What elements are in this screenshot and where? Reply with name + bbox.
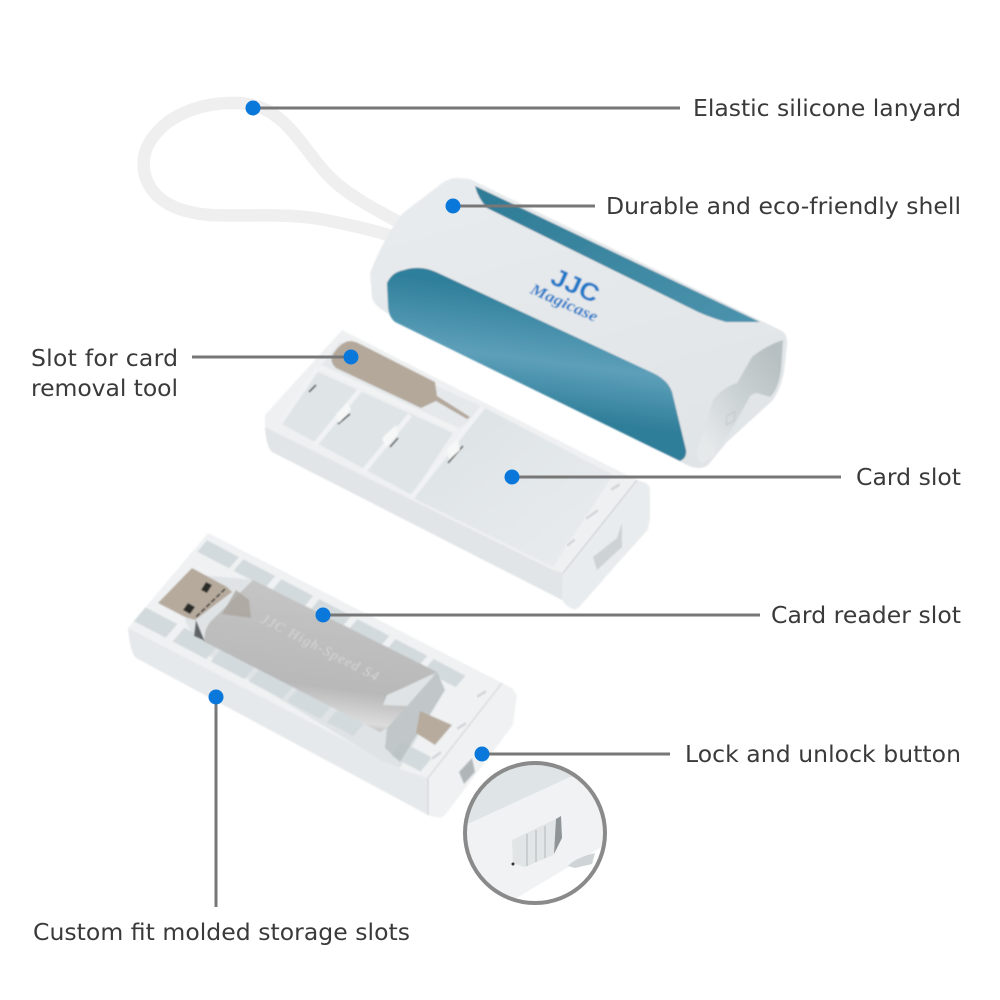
callout: slot for card removal tool: removal tool — [31, 374, 178, 402]
upper storage cells — [197, 540, 465, 687]
callout: card slot — [504, 463, 961, 491]
lock notch — [459, 758, 475, 784]
callout: card reader slot: Card reader slot — [771, 601, 961, 629]
callout: elastic silicone lanyard — [246, 94, 961, 122]
end cap seam — [563, 480, 637, 573]
callout: slot for card removal tool: Slot for card — [31, 344, 178, 372]
rib clips — [309, 385, 463, 463]
cap vents — [431, 689, 487, 761]
tray front wall — [128, 628, 428, 815]
USB-C plug and clear guard — [194, 620, 452, 762]
cap vents — [566, 482, 621, 548]
lower storage cells — [134, 607, 432, 771]
end cap seam — [428, 683, 502, 815]
tray front wall — [265, 427, 563, 600]
end cap — [562, 480, 650, 609]
callout: durable shell: Durable and eco-friendly shell — [606, 192, 961, 220]
lanyard — [144, 103, 412, 238]
inner notch — [726, 411, 735, 425]
divider ribs — [280, 367, 483, 497]
magnified lock button — [463, 761, 607, 905]
tray body — [128, 533, 517, 818]
callout: durable shell — [446, 192, 961, 220]
infographic canvas — [32, 96, 960, 945]
card reader body — [205, 580, 437, 732]
button — [512, 819, 556, 867]
shell — [370, 178, 787, 468]
callout: card slot: Card slot — [856, 463, 961, 491]
lower teal band — [387, 268, 686, 461]
upper teal band — [475, 186, 760, 322]
logo: Magicase — [527, 280, 600, 326]
left compartments floor — [280, 372, 453, 495]
logo: JJC — [547, 263, 604, 309]
callout: elastic silicone lanyard: Elastic silicone lanyard — [693, 94, 961, 122]
callout: slot for card removal tool — [31, 344, 358, 402]
callout: custom fit molded storage slots — [33, 690, 410, 946]
tool recess — [320, 342, 485, 430]
callout: custom fit molded storage slots: Custom fit molded storage slots — [33, 918, 410, 946]
logo — [527, 257, 611, 326]
reader printed text: JJC High-Speed S4 — [258, 612, 381, 685]
large compartment floor — [413, 408, 613, 567]
callout: card reader slot — [316, 601, 961, 629]
USB plug — [158, 568, 232, 620]
removal tool — [332, 341, 470, 419]
reader tray — [128, 533, 517, 818]
tray body — [265, 330, 650, 610]
lock button — [593, 523, 622, 570]
callout: lock and unlock button: Lock and unlock button — [685, 740, 961, 768]
callout: lock and unlock button — [474, 740, 961, 768]
reader cavity — [185, 575, 445, 768]
card slot tray — [265, 330, 650, 610]
shell opening — [697, 340, 783, 463]
